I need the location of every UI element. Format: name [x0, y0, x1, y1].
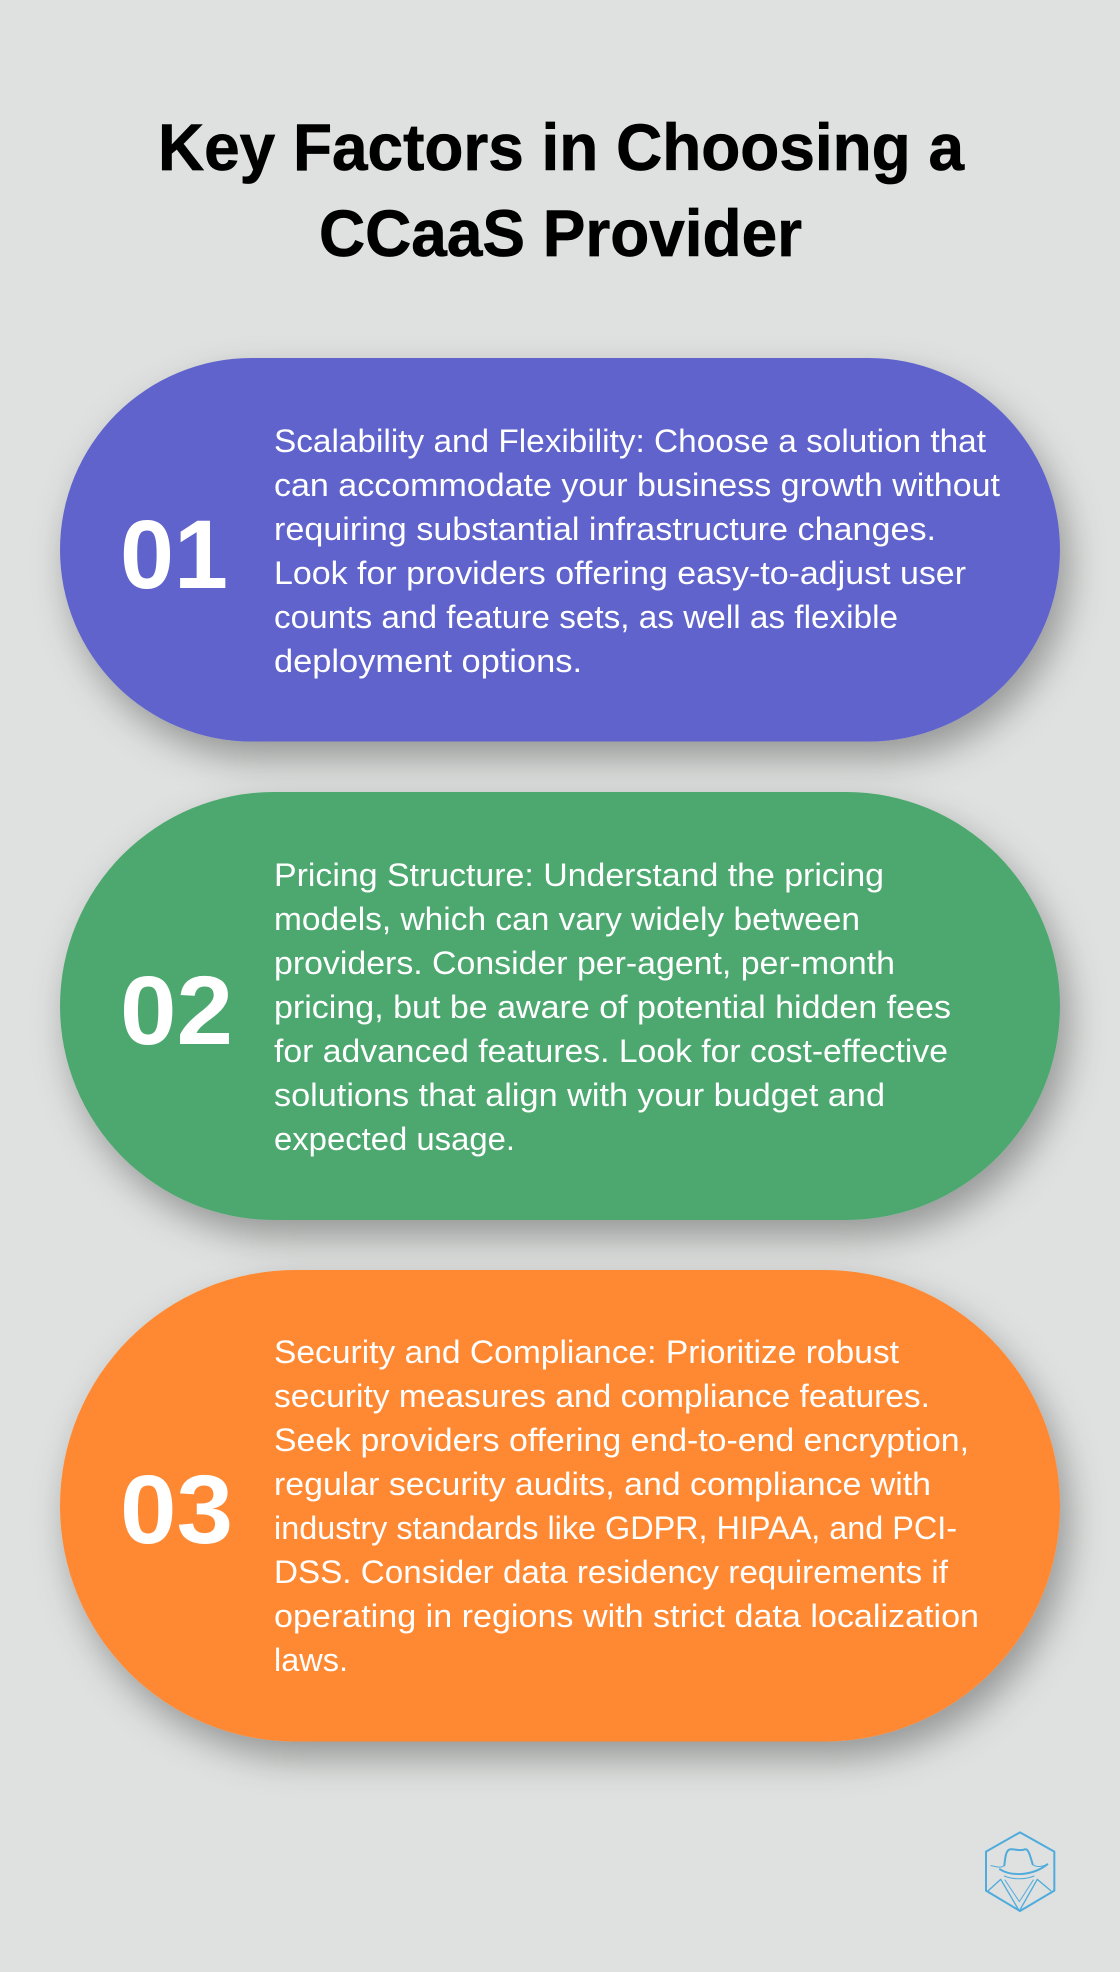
text block: pricing: expected usage.: [274, 1121, 515, 1157]
pill background: orange: [60, 1270, 1060, 1742]
text block: pricing: providers. Consider per-agent, per-month: [274, 945, 895, 981]
title: [158, 110, 965, 270]
pill background: green: [60, 792, 1060, 1220]
text block: scalability: counts and feature sets, as well as flexible: [274, 599, 898, 635]
text block: pricing: solutions that align with your budget and: [274, 1077, 885, 1113]
icon: spy logo hexagon: [986, 1832, 1054, 1911]
text block: scalability: deployment options.: [274, 643, 582, 679]
title: CCaaS Provider: [319, 196, 802, 270]
text block: scalability: Look for providers offering easy-to-adjust user: [274, 555, 966, 591]
text block: security: operating in regions with strict data localization: [274, 1598, 979, 1634]
number 02: 02: [120, 956, 233, 1065]
text block: security: industry standards like GDPR, HIPAA, and PCI-: [274, 1510, 957, 1546]
text block: pricing: Pricing Structure: Understand the pricing: [274, 857, 884, 893]
text block: pricing: models, which can vary widely between: [274, 901, 860, 937]
text block: pricing: pricing, but be aware of potential hidden fees: [274, 989, 951, 1025]
panel: security and compliance: [60, 1270, 1060, 1742]
text block: security: DSS. Consider data residency requirements if: [274, 1554, 948, 1590]
text block: security: laws.: [274, 1642, 348, 1678]
text block: scalability: [274, 423, 1000, 679]
number 03: 03: [120, 1455, 233, 1564]
text block: security: security measures and compliance features.: [274, 1378, 930, 1414]
text block: security: [274, 1334, 979, 1678]
text block: scalability: can accommodate your business growth without: [274, 467, 1000, 503]
pill background: purple: [60, 358, 1060, 742]
panel: scalability and flexibility: [60, 358, 1060, 742]
text block: security: regular security audits, and compliance with: [274, 1466, 931, 1502]
text block: pricing: for advanced features. Look for cost-effective: [274, 1033, 948, 1069]
text block: pricing: [274, 857, 951, 1157]
text block: security: Security and Compliance: Prioritize robust: [274, 1334, 899, 1370]
text block: security: Seek providers offering end-to-end encryption,: [274, 1422, 969, 1458]
panel: pricing structure: [60, 792, 1060, 1220]
title: Key Factors in Choosing a: [158, 110, 965, 184]
text block: scalability: requiring substantial infrastructure changes.: [274, 511, 936, 547]
text block: scalability: Scalability and Flexibility: Choose a solution that: [274, 423, 986, 459]
number 01: 01: [120, 500, 228, 609]
